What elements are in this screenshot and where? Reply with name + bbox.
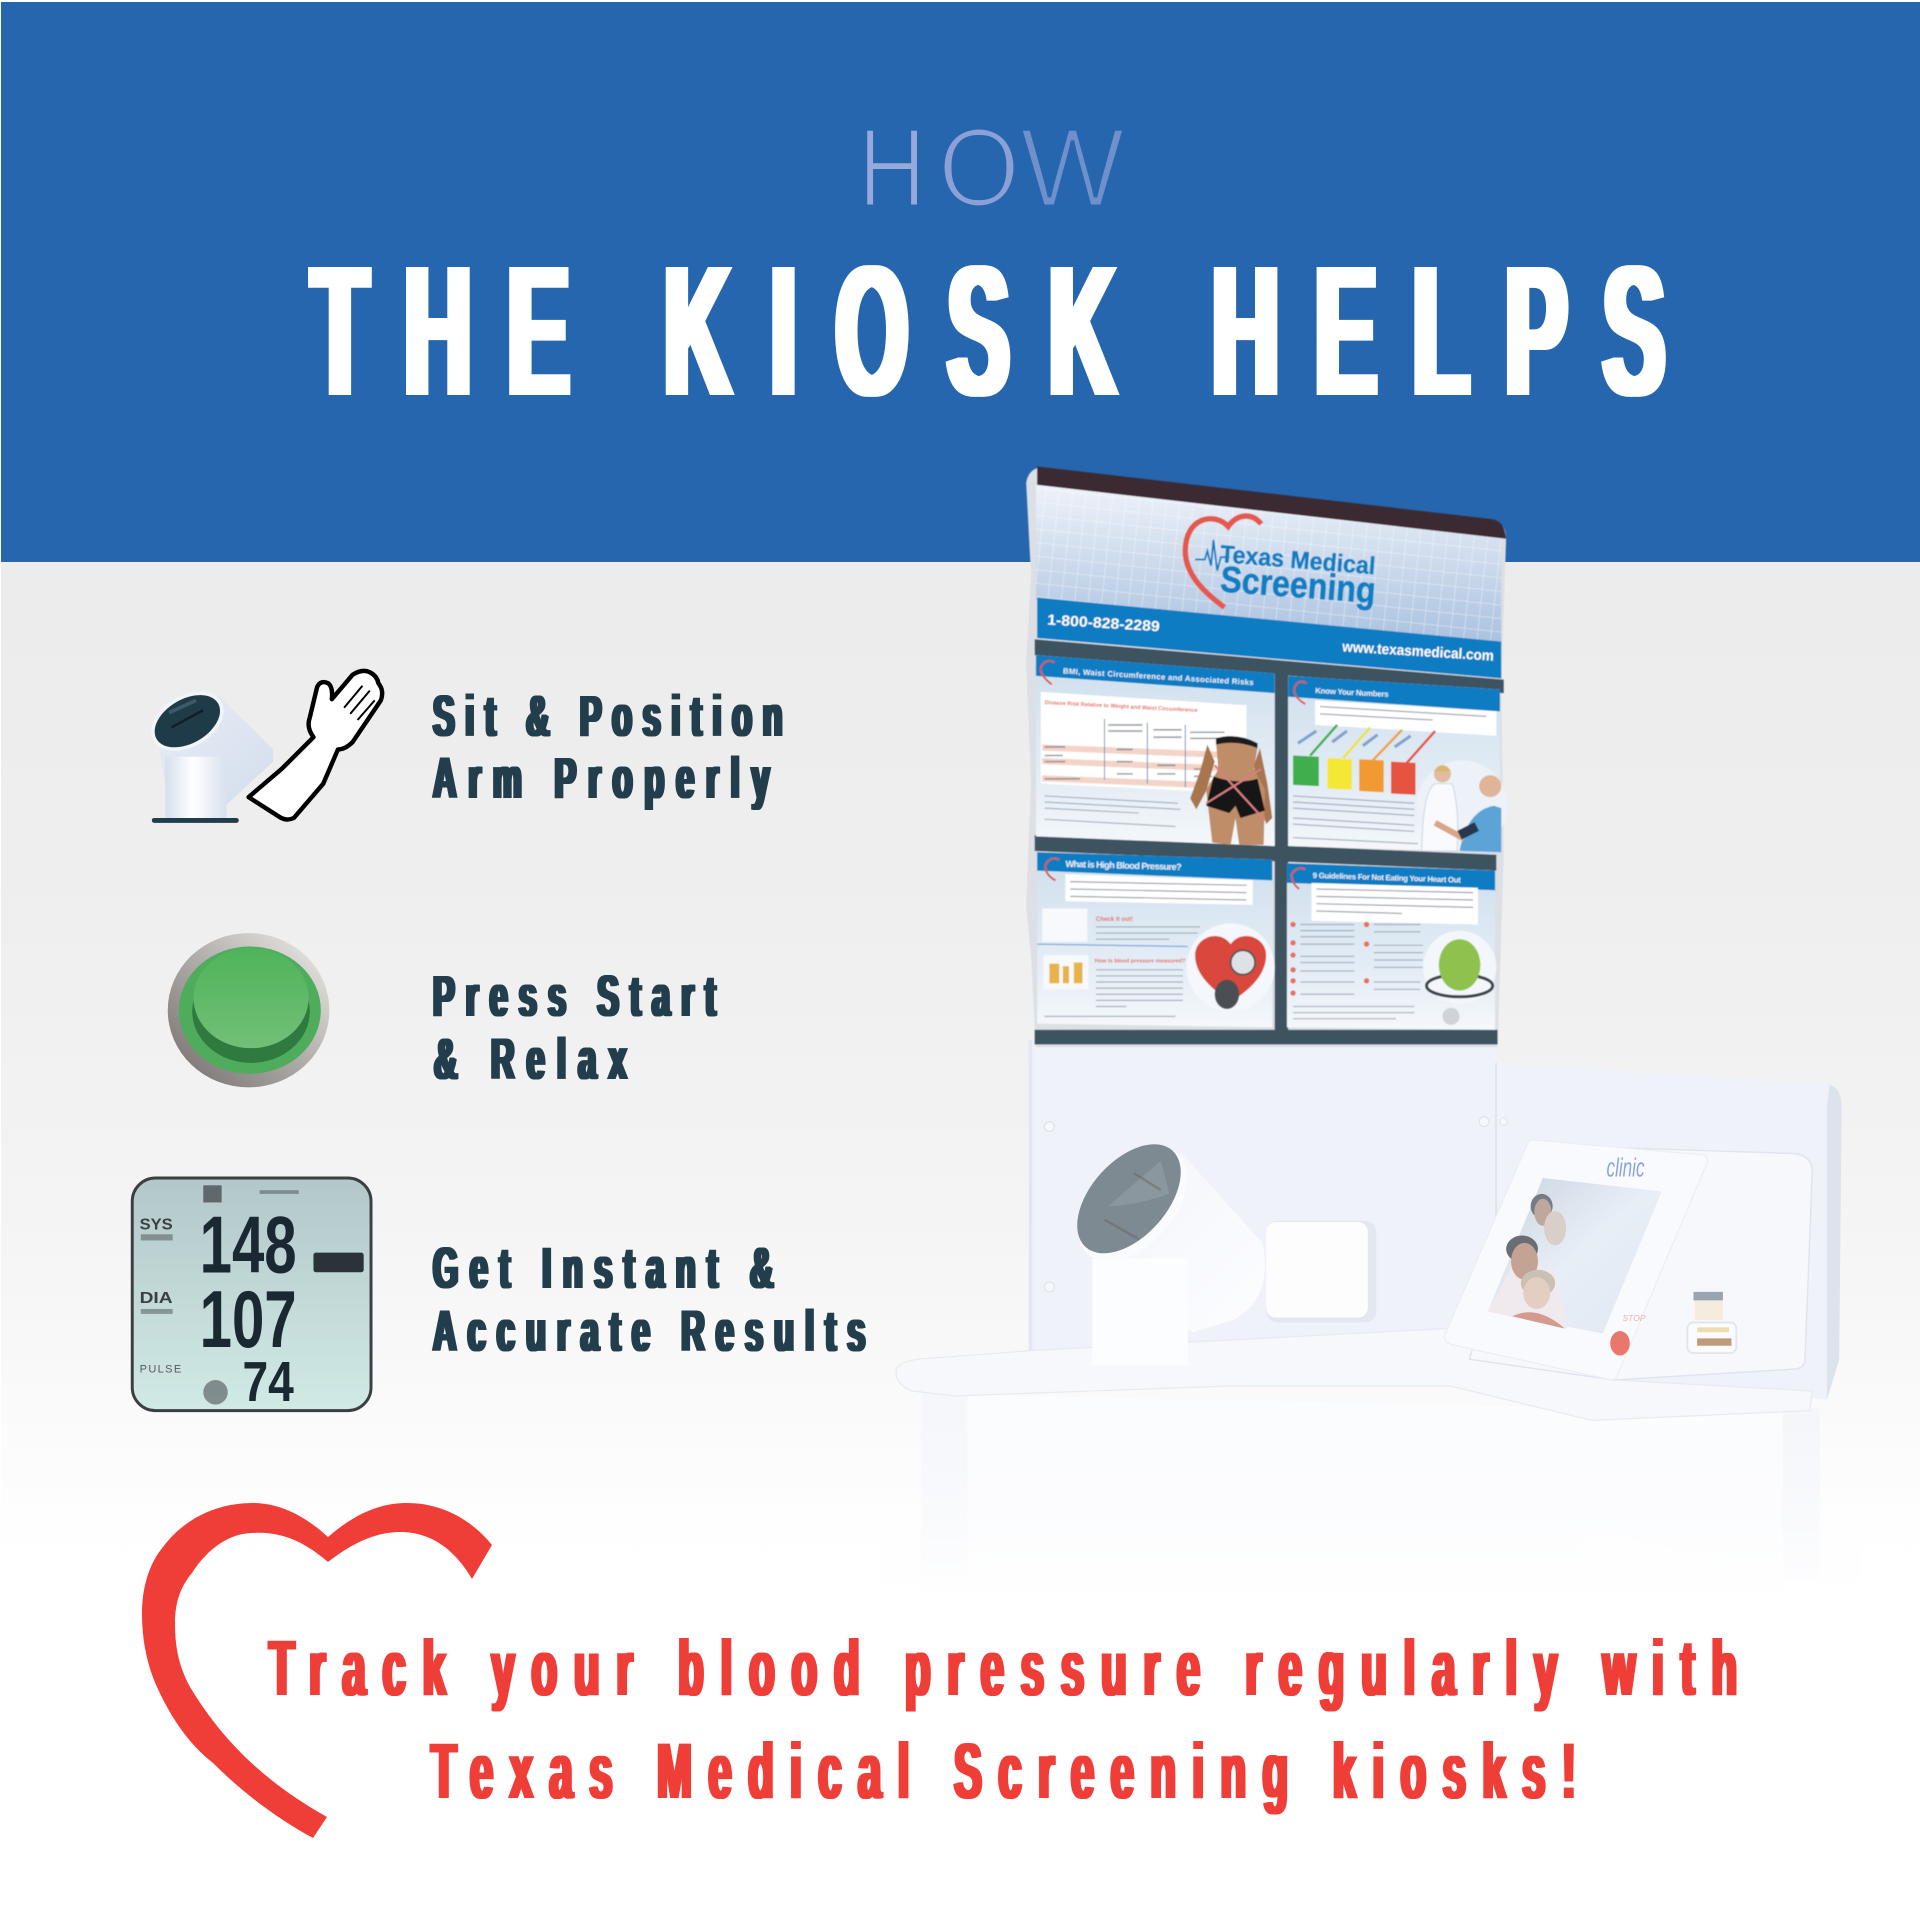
poster website: www.texasmedical.com bbox=[1341, 639, 1494, 665]
kiosk: bottom fade bbox=[882, 1414, 1861, 1604]
kiosk: faded hole bbox=[1266, 1221, 1376, 1322]
step 3 text: Accurate Results bbox=[433, 1298, 865, 1363]
button metal ring bbox=[168, 933, 329, 1087]
finger lines bbox=[344, 686, 375, 720]
kiosk: poster board bbox=[1026, 467, 1507, 1047]
step 3 icon: blood pressure display bbox=[132, 1178, 371, 1413]
step 1 text bbox=[433, 683, 782, 810]
closing message: Texas Medical Screening kiosks! bbox=[431, 1728, 1576, 1815]
small marks bbox=[141, 1185, 299, 1405]
poster blue contact band bbox=[1037, 598, 1501, 678]
closing message bbox=[269, 1625, 1737, 1815]
step 1 text: Arm Properly bbox=[433, 745, 770, 810]
kiosk: faded desk bbox=[896, 1329, 1812, 1420]
sub-panel: high blood pressure bbox=[1037, 852, 1275, 1027]
kiosk: faded monitor unit: STOP bbox=[1622, 1313, 1646, 1323]
kiosk: faded monitor unit: clinic bbox=[1607, 1155, 1645, 1183]
poster phone number: 1-800-828-2289 bbox=[1047, 613, 1160, 635]
heart and gauge bbox=[1187, 923, 1275, 1011]
kiosk: faded legs and cabinet bbox=[921, 1393, 1820, 1604]
apple and stethoscope bbox=[1423, 931, 1496, 1025]
torso photo bbox=[1190, 736, 1272, 845]
step 2 icon: green start button bbox=[168, 933, 329, 1087]
doctor and patient photo bbox=[1417, 760, 1507, 852]
header band bbox=[1, 2, 1920, 562]
sub-panel: guidelines: 9 Guidelines For Not Eating Your Heart Out bbox=[1313, 871, 1461, 885]
colour-coded stages bbox=[1293, 725, 1435, 795]
step 2 text: Press Start bbox=[433, 963, 716, 1028]
heading: HOW: W bbox=[1020, 106, 1125, 230]
display labels: SYS bbox=[140, 1216, 173, 1233]
thumbnails bbox=[1042, 909, 1087, 942]
heading: THE KIOSK HELPS: HELPS bbox=[1212, 228, 1665, 435]
heading: THE KIOSK HELPS: KIOSK bbox=[664, 228, 1116, 435]
poster logo text: Screening: Screening bbox=[1219, 559, 1377, 611]
kiosk illustration bbox=[882, 467, 1861, 1604]
sub-panel: BMI waist bbox=[1036, 655, 1275, 846]
closing message: Track your blood pressure regularly with bbox=[269, 1625, 1737, 1712]
step 3 text bbox=[433, 1235, 865, 1363]
heading: HOW bbox=[858, 106, 1125, 230]
heading: HOW: H bbox=[858, 106, 926, 230]
cuff base line bbox=[152, 818, 239, 823]
step 3 icon: blood pressure display: DIA bbox=[140, 1290, 173, 1307]
sub-panel: high blood pressure: Check it out! bbox=[1096, 916, 1133, 923]
heading: THE KIOSK HELPS: THE bbox=[312, 228, 570, 435]
cuff post bbox=[165, 757, 227, 818]
cuff opening bbox=[141, 679, 234, 763]
button shadow bbox=[192, 960, 310, 1063]
indicator bar bbox=[313, 1253, 364, 1272]
red heart outline bbox=[142, 1503, 492, 1838]
sub-panel: know your numbers: Know Your Numbers bbox=[1315, 686, 1389, 699]
step 2 text: & Relax bbox=[434, 1026, 627, 1091]
step 1 icon: cuff and arm bbox=[141, 671, 382, 823]
poster header top strip bbox=[1037, 467, 1506, 539]
sub-panel: high blood pressure: What is High Blood Pressure? bbox=[1065, 859, 1182, 872]
button cap bbox=[193, 948, 309, 1048]
kiosk: faded monitor unit bbox=[1444, 1140, 1812, 1380]
sub-panel: high blood pressure: How is blood pressure measured? bbox=[1095, 958, 1186, 964]
poster heart logo bbox=[1185, 516, 1261, 607]
sub-panel: know your numbers bbox=[1288, 676, 1507, 852]
kiosk: faded cuff bbox=[1057, 1125, 1265, 1365]
sub-panel: BMI waist: BMI, Waist Circumference and Associated Risks bbox=[1063, 666, 1255, 687]
arm outline bbox=[249, 671, 382, 820]
poster logo header bbox=[1036, 485, 1501, 644]
systolic reading: 148 bbox=[200, 1199, 297, 1289]
display frame bbox=[132, 1178, 371, 1411]
lower background gradient bbox=[1, 562, 1920, 1562]
sub-panel: BMI waist: Disease Risk Relative to Weight and Waist Circumference bbox=[1044, 700, 1198, 714]
monitor photo of people bbox=[1488, 1194, 1567, 1329]
cuff body bbox=[157, 694, 273, 804]
step 3 icon: blood pressure display: PULSE bbox=[140, 1364, 181, 1376]
step 3 text: Get Instant & bbox=[433, 1235, 773, 1300]
heading: THE KIOSK HELPS bbox=[312, 228, 1665, 435]
heading: HOW: O bbox=[938, 106, 1020, 230]
poster logo text: Texas Medical: Texas Medical bbox=[1219, 541, 1376, 580]
poster heartbeat line bbox=[1195, 540, 1229, 571]
poster backing bbox=[1026, 468, 1506, 1047]
kiosk: faded back board bbox=[1029, 1040, 1507, 1360]
kiosk: faded side panel bbox=[1496, 1063, 1842, 1400]
pulse reading: 74 bbox=[242, 1349, 294, 1413]
bullet list bbox=[1290, 922, 1369, 996]
diastolic reading: 107 bbox=[200, 1273, 297, 1364]
step 2 text bbox=[433, 963, 716, 1091]
dark frame bars bbox=[1035, 639, 1504, 1044]
sub-panel: guidelines bbox=[1287, 863, 1496, 1030]
step 1 text: Sit & Position bbox=[433, 683, 782, 748]
